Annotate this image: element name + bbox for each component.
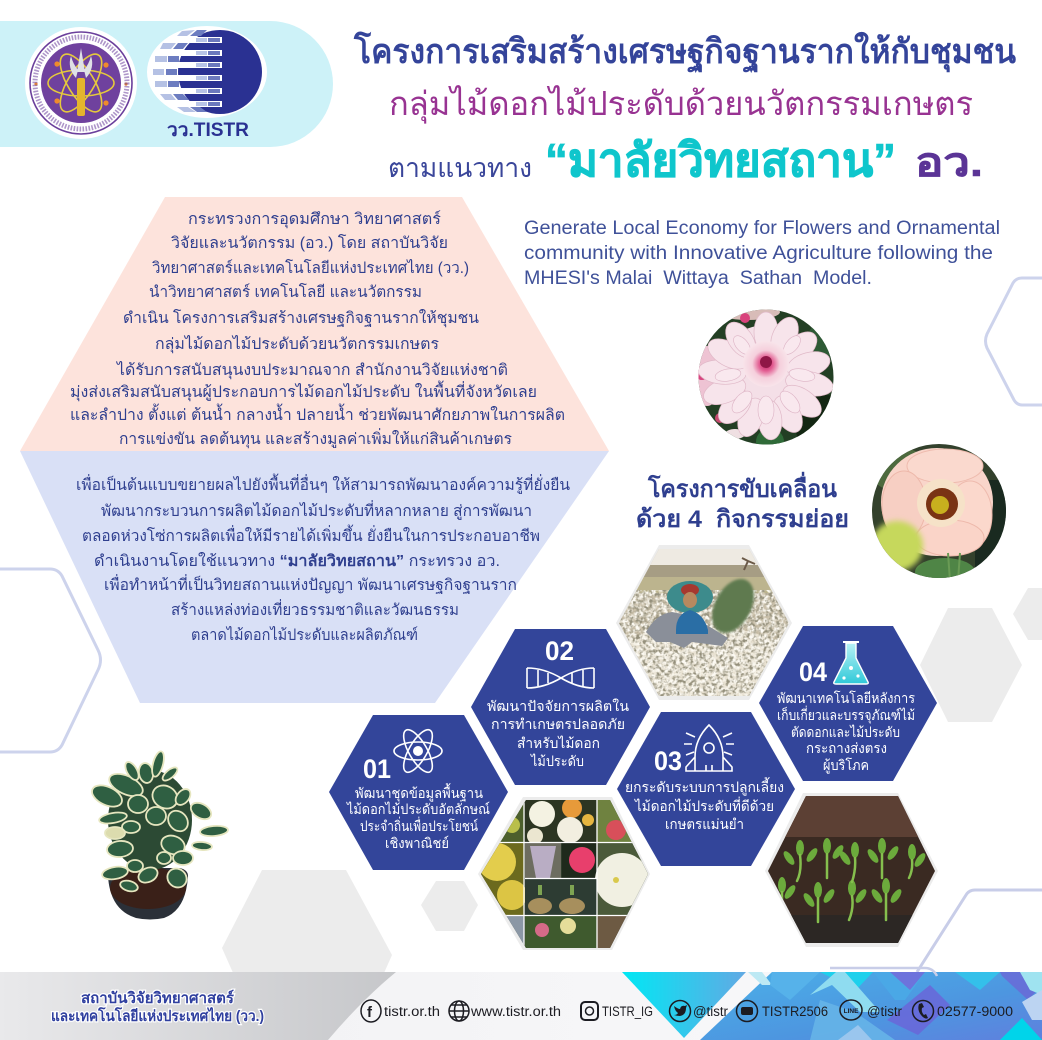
grey background hexagons: [222, 588, 1042, 1000]
photo hexagon: farmer in flower field: [616, 545, 792, 700]
contact: phone: [912, 1000, 1013, 1022]
card 01: ประจำถิ่นเพื่อประโยชน์: [360, 817, 478, 834]
card 02: สำหรับไม้ดอก: [517, 735, 600, 751]
title: โครงการเสริมสร้างเศรษฐกิจฐานรากให้กับชุมชน: [353, 31, 1016, 74]
organisation name: [51, 989, 264, 1025]
contact: line: [840, 1000, 902, 1020]
card 02: [471, 629, 650, 785]
footer: [0, 968, 1042, 1040]
photo hexagon: flower collage: [478, 797, 651, 952]
icon: atom: [394, 726, 442, 776]
card 02: การทำเกษตรปลอดภัย: [491, 716, 625, 732]
panel: peach trapezoid with text: นำวิทยาศาสตร์ เทคโนโลยี และนวัตกรรม: [149, 283, 422, 301]
footer grey section: [0, 972, 396, 1040]
contact: website: [449, 1001, 561, 1021]
card 04: ผู้บริโภค: [823, 757, 869, 774]
panel: peach trapezoid with text: และลำปาง ตั้งแต่ ต้นน้ำ กลางน้ำ ปลายน้ำ ช่วยพัฒนาศักยภาพในการผลิต: [70, 403, 565, 424]
panel: peach trapezoid with text: กระทรวงการอุดมศึกษา วิทยาศาสตร์: [188, 210, 441, 229]
contact: twitter: @tistr: [693, 1004, 728, 1019]
contact: facebook: tistr.or.th: [384, 1004, 440, 1019]
icon: flask: [834, 642, 868, 684]
card 03: [617, 712, 795, 866]
panel: peach trapezoid with text: วิจัยและนวัตกรรม (อว.) โดย สถาบันวิจัย: [171, 234, 448, 252]
english description: MHESI's Malai Wittaya Sathan Model.: [524, 268, 872, 289]
card 02: ไม้ประดับ: [530, 753, 584, 769]
logo: ministry seal: [25, 27, 137, 139]
photo: peach lisianthus: [872, 444, 1006, 578]
card 03: เกษตรแม่นยำ: [665, 816, 744, 832]
contact: youtube: [736, 1000, 828, 1022]
panel: peach trapezoid with text: มุ่งส่งเสริมสนับสนุนผู้ประกอบการไม้ดอกไม้ประดับ ในพื้นที่จังหวัดเลย: [70, 380, 537, 402]
card 03: ยกระดับระบบการปลูกเลี้ยง: [625, 777, 784, 796]
logo: TISTR: วว.TISTR: [167, 120, 249, 141]
organisation name: และเทคโนโลยีแห่งประเทศไทย (วว.): [51, 1006, 264, 1025]
title: กลุ่มไม้ดอกไม้ประดับด้วยนวัตกรรมเกษตร: [389, 85, 973, 124]
card 04: พัฒนาเทคโนโลยีหลังการ: [777, 690, 915, 706]
card 04: 04: [799, 657, 827, 687]
panel: blue hexagon half with text: เพื่อเป็นต้นแบบขยายผลไปยังพื้นที่อื่นๆ ให้สามารถพัฒนาองค์ความรู้ที่ยั่งยืน: [76, 473, 570, 495]
card 01: 01: [363, 754, 391, 784]
title: [353, 31, 1016, 186]
heading: four sub-activities: [636, 471, 849, 533]
english description: Generate Local Economy for Flowers and Ornamental: [524, 218, 1000, 239]
card 01: พัฒนาชุดข้อมูลพื้นฐาน: [355, 783, 483, 802]
photo: potted variegated plant: [89, 750, 228, 920]
card 03: 03: [654, 746, 682, 776]
contact: twitter: [670, 1000, 728, 1022]
contact: line: @tistr: [867, 1004, 902, 1019]
panel: peach trapezoid with text: วิทยาศาสตร์และเทคโนโลยีแห่งประเทศไทย (วว.): [152, 259, 469, 277]
english description: community with Innovative Agriculture following the: [524, 243, 993, 264]
heading: four sub-activities: ด้วย 4 กิจกรรมย่อย: [636, 506, 849, 533]
card 04: กระถางส่งตรง: [806, 740, 887, 756]
contact: website: www.tistr.or.th: [470, 1004, 561, 1019]
panel: peach trapezoid with text: ได้รับการสนับสนุนงบประมาณจาก สำนักงานวิจัยแห่งชาติ: [115, 361, 508, 380]
card 02: 02: [545, 636, 574, 666]
contact: phone: 02577-9000: [937, 1004, 1013, 1019]
contact: youtube: TISTR2506: [762, 1004, 828, 1019]
panel: blue hexagon half with text: เพื่อทำหน้าที่เป็นวิทยสถานแห่งปัญญา พัฒนาเศรษฐกิจฐานราก: [104, 574, 517, 594]
logo: TISTR: [147, 26, 267, 141]
heading: four sub-activities: โครงการขับเคลื่อน: [647, 471, 838, 503]
card 04: ตัดดอกและไม้ประดับ: [791, 724, 900, 740]
contact: facebook: f: [367, 1004, 373, 1021]
card 03: ไม้ดอกไม้ประดับที่ดีด้วย: [634, 797, 774, 814]
panel: peach trapezoid with text: [20, 197, 609, 451]
title: ตามแนวทาง: [388, 153, 532, 183]
contact: line: LINE: [844, 1008, 859, 1015]
decorative outline hexagons: [0, 569, 100, 752]
title: “มาลัยวิทยสถาน”: [545, 134, 896, 186]
photo hexagon: seedlings in soil: [765, 793, 940, 949]
header background pill: [0, 21, 333, 147]
contact: facebook: [361, 1000, 440, 1022]
card 04: เก็บเกี่ยวและบรรจุภัณฑ์ไม้: [777, 706, 915, 724]
icon: rocket: [684, 725, 734, 771]
panel: peach trapezoid with text: ดำเนิน โครงการเสริมสร้างเศรษฐกิจฐานรากให้ชุมชน: [123, 309, 479, 328]
card 01: [329, 715, 508, 870]
panel: blue hexagon half with text: [20, 451, 609, 703]
panel: blue hexagon half with text: สร้างแหล่งท่องเที่ยวธรรมชาติและวัฒนธรรม: [171, 599, 459, 619]
card 02: พัฒนาปัจจัยการผลิตใน: [487, 698, 629, 714]
panel: blue hexagon half with text: ตลอดห่วงโซ่การผลิตเพื่อให้มีรายได้เพิ่มขึ้น ยั่งยืนในการประกอบอาชีพ: [82, 524, 540, 545]
contact: instagram: [581, 1002, 653, 1020]
panel: blue hexagon half with text: ดำเนินงานโดยใช้แนวทาง “มาลัยวิทยสถาน” กระทรวง อว.: [94, 552, 500, 570]
card 01: เชิงพาณิชย์: [385, 835, 449, 851]
contact: instagram: TISTR_IG: [602, 1004, 653, 1019]
organisation name: สถาบันวิจัยวิทยาศาสตร์: [81, 989, 235, 1007]
card 04: [759, 626, 937, 781]
panel: blue hexagon half with text: พัฒนากระบวนการผลิตไม้ดอกไม้ประดับที่หลากหลาย สู่การพัฒนา: [101, 500, 532, 521]
card 01: ไม้ดอกไม้ประดับอัตลักษณ์: [346, 801, 490, 817]
english description: [524, 218, 1000, 289]
title: อว.: [915, 141, 983, 185]
icon: dna: [527, 668, 594, 688]
footer blue triangles: [622, 968, 1042, 1040]
panel: peach trapezoid with text: กลุ่มไม้ดอกไม้ประดับด้วยนวัตกรรมเกษตร: [155, 335, 439, 354]
panel: peach trapezoid with text: การแข่งขัน ลดต้นทุน และสร้างมูลค่าเพิ่มให้แก่สินค้าเกษตร: [119, 428, 512, 449]
panel: blue hexagon half with text: ตลาดไม้ดอกไม้ประดับและผลิตภัณฑ์: [191, 626, 418, 644]
photo: pink chrysanthemum: [698, 310, 834, 444]
